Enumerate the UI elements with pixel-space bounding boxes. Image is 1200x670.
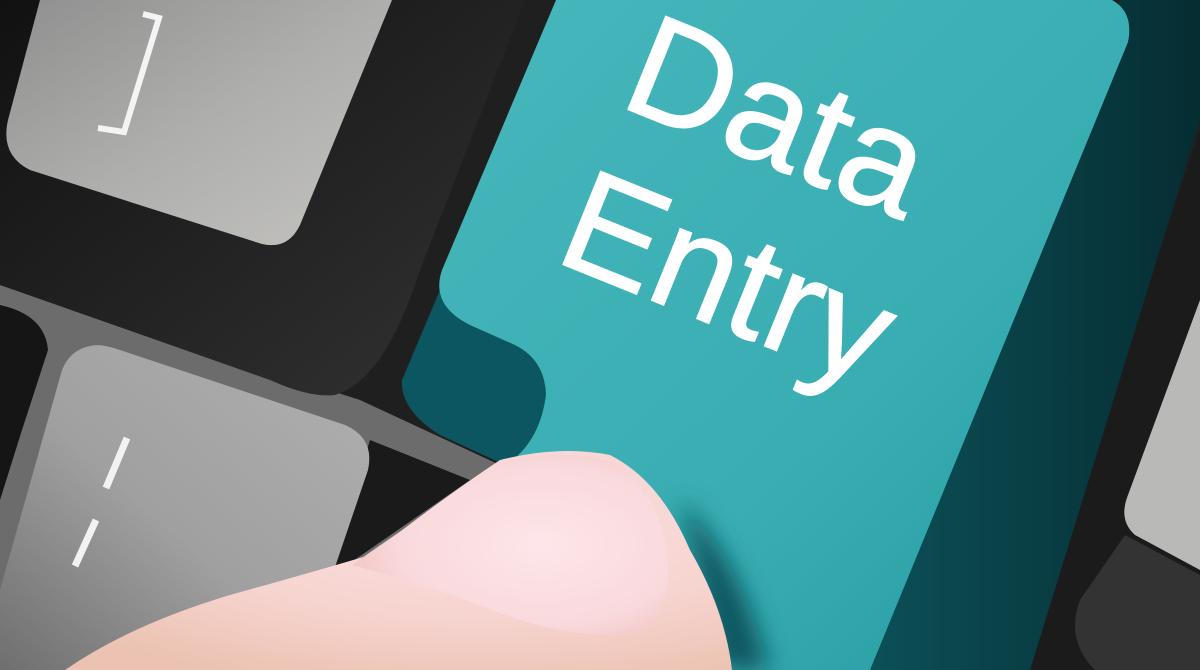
- thumbnail: [352, 455, 668, 636]
- teal key top: [439, 0, 1129, 670]
- key glyph: bracket: [98, 14, 159, 132]
- key: small black left key: [0, 305, 48, 500]
- key: upper left bracket key: [0, 0, 525, 395]
- teal key notch shadow: [402, 290, 560, 465]
- gap between keys: [0, 285, 500, 670]
- key glyph: dashes: [75, 438, 127, 566]
- key shadow under thumb: [680, 500, 770, 670]
- teal key side wall: [870, 0, 1200, 670]
- thumb: [65, 451, 732, 670]
- label: Data Entry: Entry: [540, 138, 917, 416]
- key: lower left dash key: [0, 345, 470, 670]
- label: Data Entry: [540, 0, 953, 416]
- key: right side dark keys: [1020, 130, 1200, 670]
